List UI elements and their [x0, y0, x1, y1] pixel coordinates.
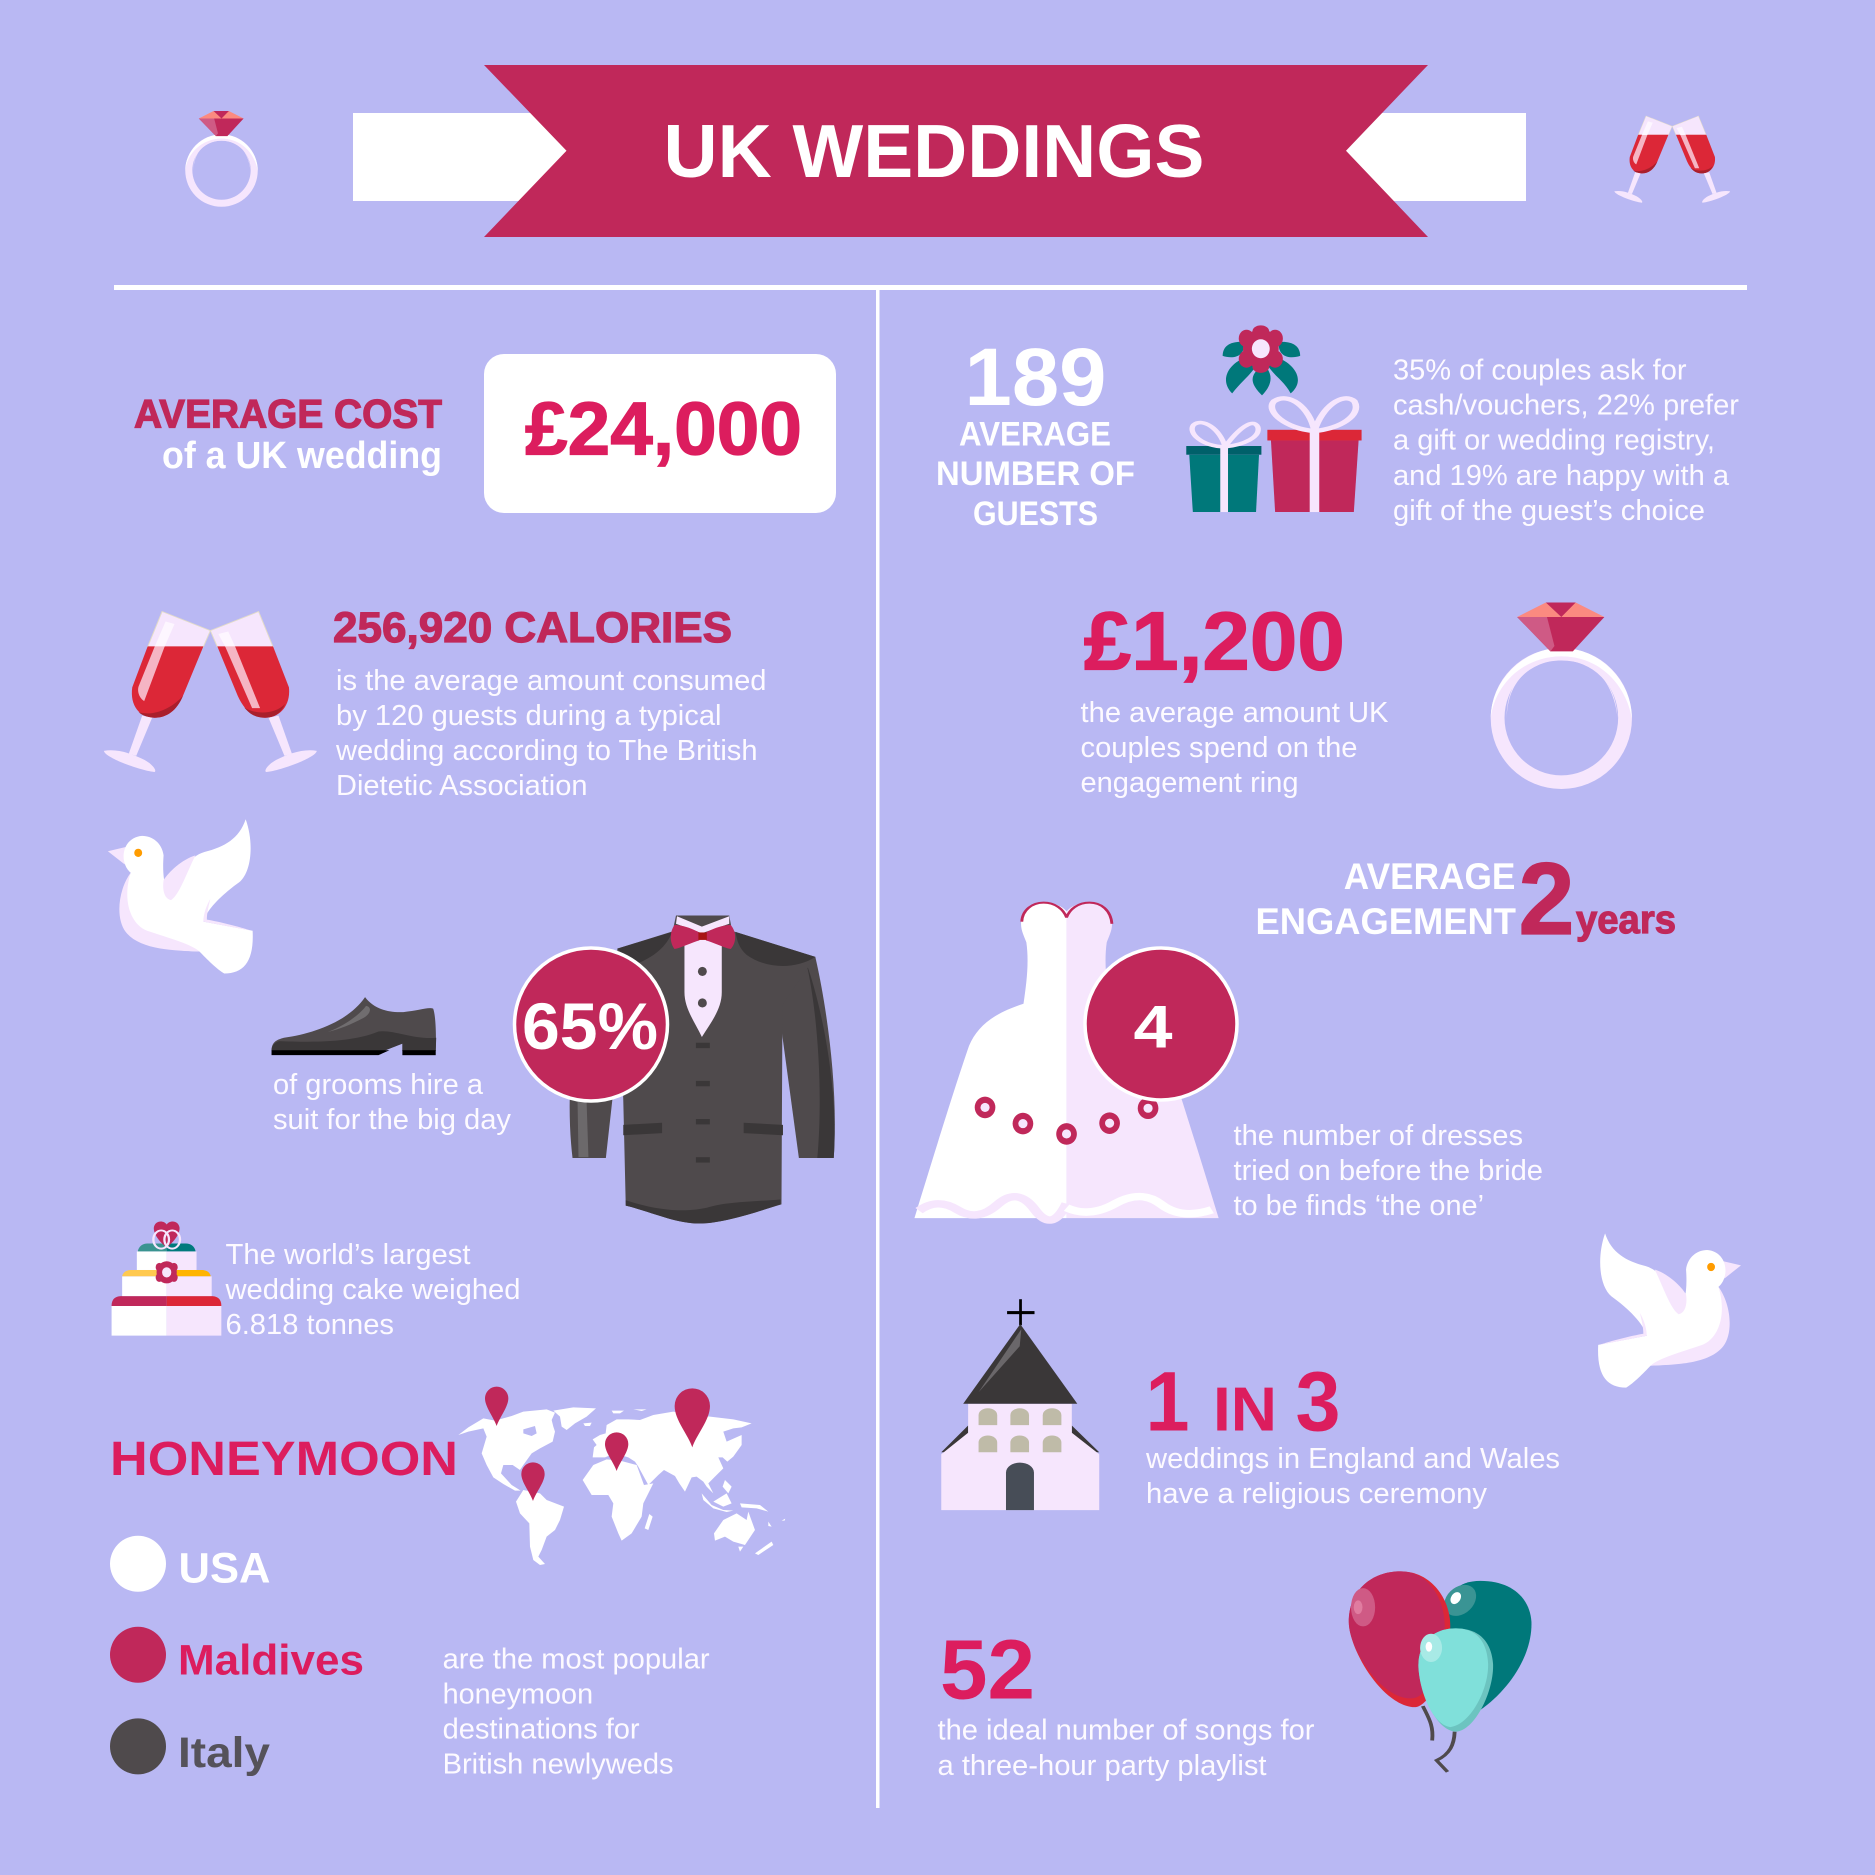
stat: calories	[333, 604, 766, 802]
text: cake: The world’s largest	[226, 1239, 470, 1271]
icon: header wine glasses	[1614, 116, 1730, 203]
stat: calories: by 120 guests during a typical	[336, 700, 722, 732]
stat: 189 guests: 189	[964, 332, 1106, 423]
text: honeymoon description: are the most popular	[443, 1644, 710, 1676]
text: grooms: of grooms hire a	[273, 1069, 484, 1101]
text: honeymoon description: destinations for	[443, 1714, 640, 1746]
icon: dove right	[1598, 1233, 1741, 1388]
text: dresses: tried on before the bride	[1234, 1155, 1543, 1187]
stat: 52 songs	[938, 1622, 1315, 1782]
text: gift preferences: 35% of couples ask for	[1393, 355, 1687, 387]
callout: 4 dresses	[1085, 948, 1237, 1100]
text: gift preferences: a gift or wedding registry,	[1393, 425, 1715, 457]
text: grooms	[273, 1069, 511, 1136]
icon: shoe	[272, 997, 436, 1055]
legend: Maldives	[110, 1627, 364, 1684]
icon: suit	[570, 915, 835, 1224]
callout: 65%	[514, 948, 668, 1101]
stat: 52 songs: the ideal number of songs for	[938, 1715, 1315, 1747]
callout: 65%: 65%	[522, 989, 658, 1063]
icon: cake	[112, 1222, 221, 1336]
stat: calories: Dietetic Association	[336, 770, 588, 802]
stat: 189 guests	[936, 332, 1135, 533]
stat: 189 guests: NUMBER OF	[936, 455, 1135, 493]
legend: Italy: Italy	[178, 1729, 270, 1777]
icon: balloons	[1349, 1571, 1531, 1772]
text: honeymoon description	[443, 1644, 710, 1780]
stat: 189 guests: AVERAGE	[959, 416, 1111, 454]
text: cake: 6.818 tonnes	[226, 1309, 394, 1341]
icon: church	[941, 1299, 1099, 1510]
legend: Italy	[110, 1718, 270, 1777]
text: honeymoon description: British newlyweds	[443, 1748, 674, 1780]
stat: engagement ring spend: the average amount UK	[1080, 697, 1389, 729]
stat: calories: 256,920 CALORIES	[333, 604, 732, 652]
stat: 1 in 3	[1145, 1354, 1560, 1510]
callout: 4 dresses: 4	[1134, 994, 1173, 1061]
text: cake	[224, 1239, 520, 1341]
stat: average engagement	[1256, 842, 1676, 956]
text: gift preferences: and 19% are happy with a	[1393, 460, 1730, 492]
icon: gifts	[1186, 325, 1362, 512]
panel: cost card	[484, 354, 836, 513]
icon: header ring	[185, 111, 258, 207]
text: honeymoon description: honeymoon	[443, 1679, 593, 1711]
stat: 52 songs: a three-hour party playlist	[938, 1750, 1266, 1782]
legend: USA: USA	[178, 1545, 270, 1593]
text: dresses	[1234, 1120, 1543, 1222]
icon: wine glasses	[104, 612, 317, 772]
stat: 1 in 3: have a religious ceremony	[1146, 1478, 1488, 1510]
stat: 52 songs: 52	[940, 1622, 1035, 1716]
stat: average engagement: AVERAGE	[1344, 856, 1515, 897]
heading: average cost: AVERAGE COST	[134, 392, 442, 436]
icon: dove left	[108, 819, 253, 974]
icon: dress	[914, 903, 1219, 1220]
icon: engagement ring	[1491, 602, 1632, 789]
stat: engagement ring spend	[1080, 594, 1389, 799]
heading: honeymoon: HONEYMOON	[110, 1433, 458, 1486]
legend: USA	[110, 1536, 270, 1593]
stat: 1 in 3: weddings in England and Wales	[1145, 1443, 1560, 1475]
stat: average engagement: ENGAGEMENT	[1256, 901, 1516, 942]
stat: engagement ring spend: £1,200	[1084, 594, 1345, 688]
stat: average engagement: 2	[1518, 842, 1574, 956]
stat: calories: wedding according to The British	[335, 735, 758, 767]
title: UK WEDDINGS	[664, 109, 1204, 193]
stat: average engagement: years	[1576, 898, 1676, 942]
stat: 189 guests: GUESTS	[973, 495, 1098, 533]
stat: 1 in 3: 3	[1296, 1354, 1340, 1448]
text: dresses: to be finds ‘the one’	[1234, 1190, 1484, 1222]
heading: average cost: of a UK wedding	[162, 435, 442, 477]
stat: 1 in 3: IN	[1213, 1376, 1277, 1444]
legend: Maldives: Maldives	[178, 1636, 364, 1684]
stat: engagement ring spend: couples spend on the	[1080, 732, 1358, 764]
chart: world map with pins	[458, 1387, 785, 1565]
text: grooms: suit for the big day	[273, 1104, 511, 1136]
text: dresses: the number of dresses	[1234, 1120, 1523, 1152]
text: gift preferences	[1393, 355, 1739, 527]
text: gift preferences: cash/vouchers, 22% prefer	[1393, 389, 1739, 421]
stat: 1 in 3: 1	[1146, 1354, 1190, 1448]
text: cake: wedding cake weighed	[224, 1274, 520, 1306]
panel: cost card: £24,000	[525, 386, 802, 470]
title banner	[353, 65, 1526, 237]
stat: engagement ring spend: engagement ring	[1080, 767, 1298, 799]
heading: average cost	[134, 392, 442, 477]
text: gift preferences: gift of the guest’s choice	[1393, 495, 1705, 527]
stat: calories: is the average amount consumed	[336, 665, 766, 697]
